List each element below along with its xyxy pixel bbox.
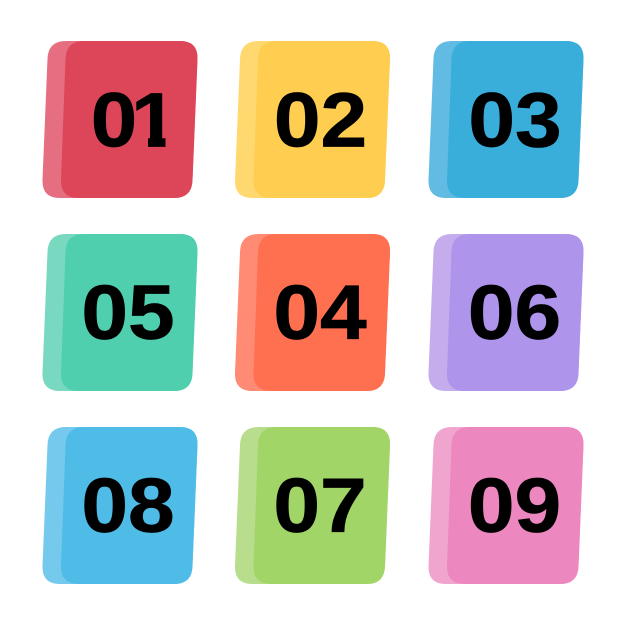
card 04: 04 [273,270,367,356]
card 07: 07 [273,463,367,549]
card 01 [42,41,198,198]
card 09: 09 [468,463,561,549]
card 04 [235,234,390,391]
card 08 [42,427,198,584]
card 03: 03 [468,78,562,164]
card 08: 08 [81,463,175,549]
card 02 [235,41,390,198]
card 06: 06 [468,270,561,356]
card 03 [428,41,584,198]
card 02: 02 [274,78,367,164]
card 09 [428,427,584,584]
card 07 [235,427,390,584]
card 05: 05 [81,270,175,356]
card 05 [42,234,198,391]
card 06 [428,234,584,391]
card 01: 01 [91,76,176,163]
